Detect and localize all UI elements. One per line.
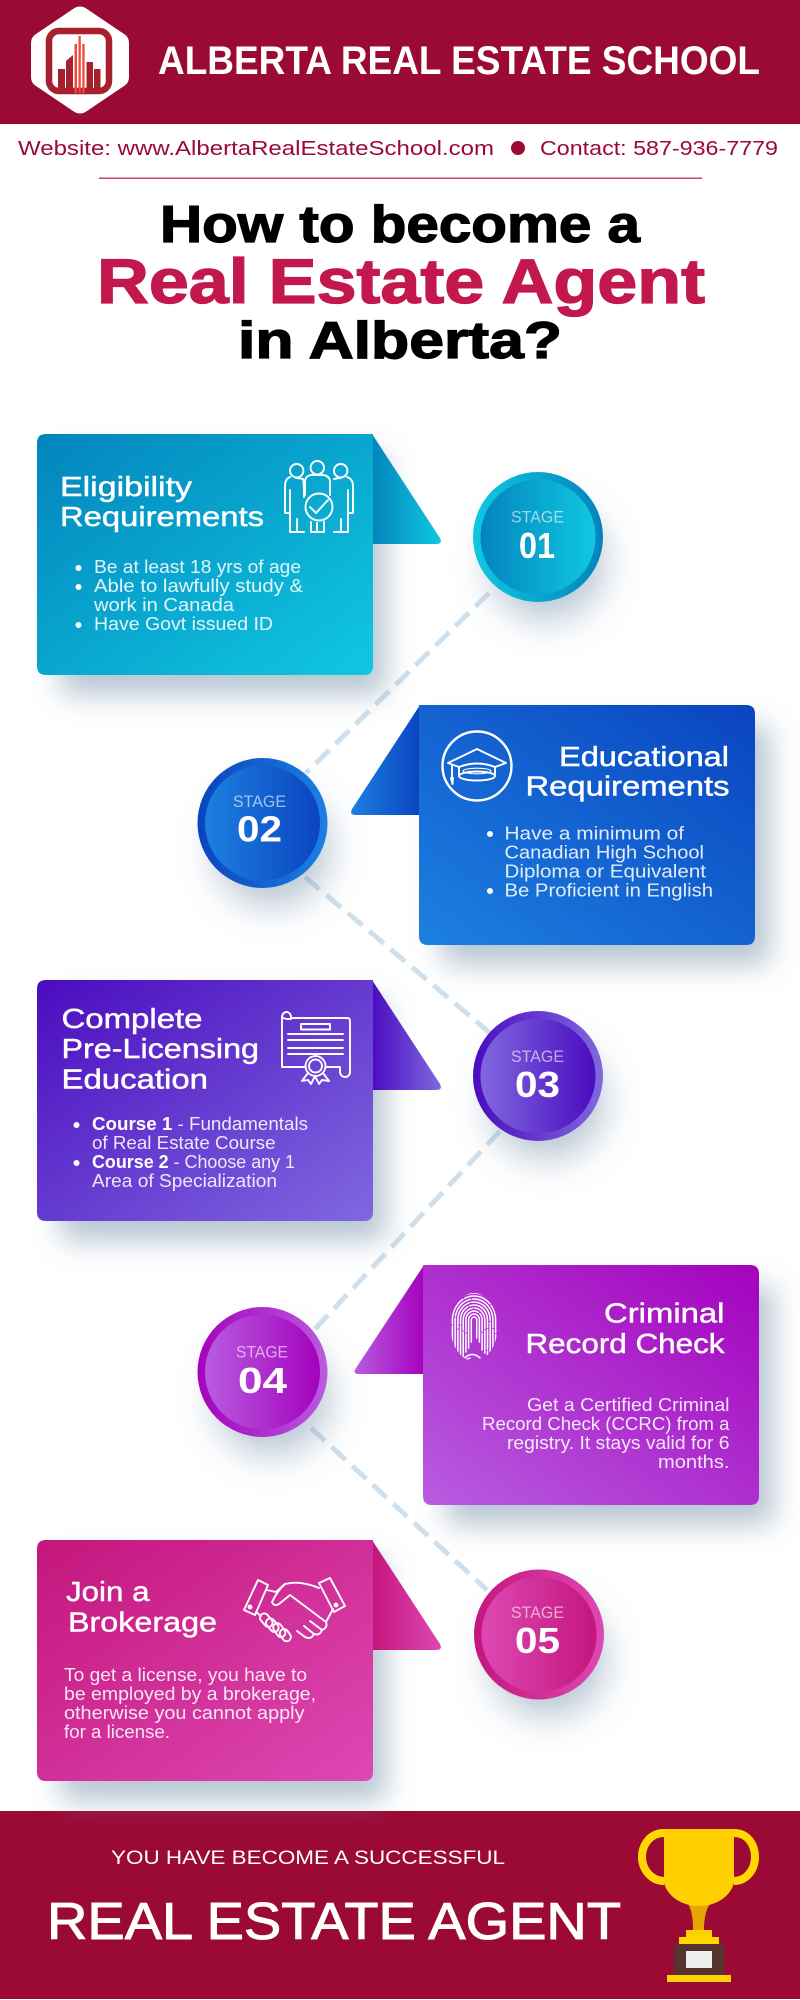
contact line: Contact: 587-936-7779: [540, 138, 778, 160]
stage 04 badge: 04: [238, 1360, 287, 1401]
panel: stage 1 eligibility requirements: [37, 434, 441, 675]
heading: [62, 1003, 259, 1094]
header title: ALBERTA REAL ESTATE SCHOOL: [158, 39, 760, 83]
icon: graduation cap: [442, 732, 512, 800]
panel: stage 5 join a brokerage: [37, 1540, 441, 1781]
bullet list: Be at least 18 yrs of age: [94, 557, 301, 577]
bullet list: [487, 824, 713, 900]
stage 05 badge: [474, 1570, 604, 1700]
body text: Record Check (CCRC) from a: [482, 1414, 731, 1434]
heading: [66, 1576, 217, 1638]
body text: be employed by a brokerage,: [64, 1684, 316, 1704]
body text: To get a license, you have to: [64, 1665, 307, 1685]
heading: Brokerage: [68, 1606, 217, 1638]
stage 01 badge: [473, 472, 603, 602]
footer band: [0, 1811, 800, 1999]
stage 01 badge: STAGE: [511, 508, 564, 526]
contact line: Website: www.AlbertaRealEstateSchool.com: [18, 138, 494, 160]
body text: [64, 1665, 316, 1742]
heading: Criminal: [604, 1298, 724, 1328]
body text: months.: [658, 1452, 730, 1472]
stage 03 badge: STAGE: [511, 1047, 564, 1066]
bullet list: Able to lawfully study &: [94, 576, 303, 596]
bullet list: Be Proficient in English: [504, 880, 713, 900]
header band: [0, 0, 800, 124]
stage 04 badge: [198, 1307, 328, 1437]
bullet list: Course 2 - Choose any 1: [92, 1152, 295, 1172]
heading: Pre-Licensing: [62, 1033, 259, 1064]
heading: Join a: [66, 1576, 150, 1607]
bullet list: Have a minimum of: [504, 824, 685, 844]
main title: Real Estate Agent: [97, 247, 705, 317]
stage 01 badge: 01: [519, 525, 555, 566]
stage 04 badge: STAGE: [236, 1342, 288, 1362]
bullet list: Course 1 - Fundamentals: [92, 1114, 308, 1134]
heading: Requirements: [60, 501, 264, 532]
bullet list: Area of Specialization: [92, 1171, 277, 1191]
bullet list: of Real Estate Course: [92, 1133, 276, 1153]
stage 03 badge: 03: [515, 1064, 560, 1105]
main title: in Alberta?: [238, 312, 562, 370]
panel: stage 2 educational requirements: [351, 705, 755, 945]
bullet list: work in Canada: [93, 595, 235, 615]
heading: Educational: [559, 741, 729, 772]
icon: fingerprint: [452, 1293, 496, 1360]
contact line: [18, 138, 778, 160]
heading: Record Check: [526, 1328, 726, 1359]
body text: registry. It stays valid for 6: [507, 1433, 730, 1453]
panel: stage 4 criminal record check: [355, 1265, 759, 1505]
heading: [526, 741, 730, 802]
body text: Get a Certified Criminal: [527, 1395, 730, 1415]
logo: hexagon with city skyline: [31, 6, 129, 114]
icon: certificate: [282, 1012, 350, 1084]
heading: Complete: [62, 1003, 202, 1034]
icon: people with check mark: [285, 461, 353, 532]
stage 02 badge: 02: [237, 808, 282, 850]
stage 03 badge: [473, 1011, 603, 1141]
bullet list: Canadian High School: [504, 842, 704, 862]
main title: [97, 196, 705, 370]
stage 02 badge: STAGE: [233, 792, 286, 811]
icon: gold trophy: [642, 1829, 755, 1982]
stage 02 badge: [198, 758, 328, 888]
bullet list: Diploma or Equivalent: [504, 862, 706, 882]
stage 05 badge: STAGE: [511, 1603, 564, 1622]
heading: Education: [62, 1064, 208, 1094]
footer text: YOU HAVE BECOME A SUCCESSFUL: [111, 1847, 505, 1869]
bullet list: [76, 557, 303, 634]
bullet list: Have Govt issued ID: [94, 614, 273, 634]
main title: How to become a: [160, 196, 641, 254]
bullet list: [74, 1114, 308, 1191]
heading: [526, 1298, 726, 1359]
heading: Requirements: [526, 770, 730, 802]
dashed connector path: [305, 593, 500, 1590]
footer text: [47, 1847, 621, 1951]
body text: for a license.: [64, 1722, 170, 1742]
heading: Eligibility: [60, 471, 192, 502]
icon: handshake: [244, 1578, 345, 1643]
stage 05 badge: 05: [515, 1620, 560, 1661]
footer text: REAL ESTATE AGENT: [47, 1893, 621, 1951]
body text: otherwise you cannot apply: [64, 1703, 304, 1723]
body text: [482, 1395, 731, 1472]
heading: [60, 471, 264, 532]
panel: stage 3 pre-licensing education: [37, 980, 441, 1221]
